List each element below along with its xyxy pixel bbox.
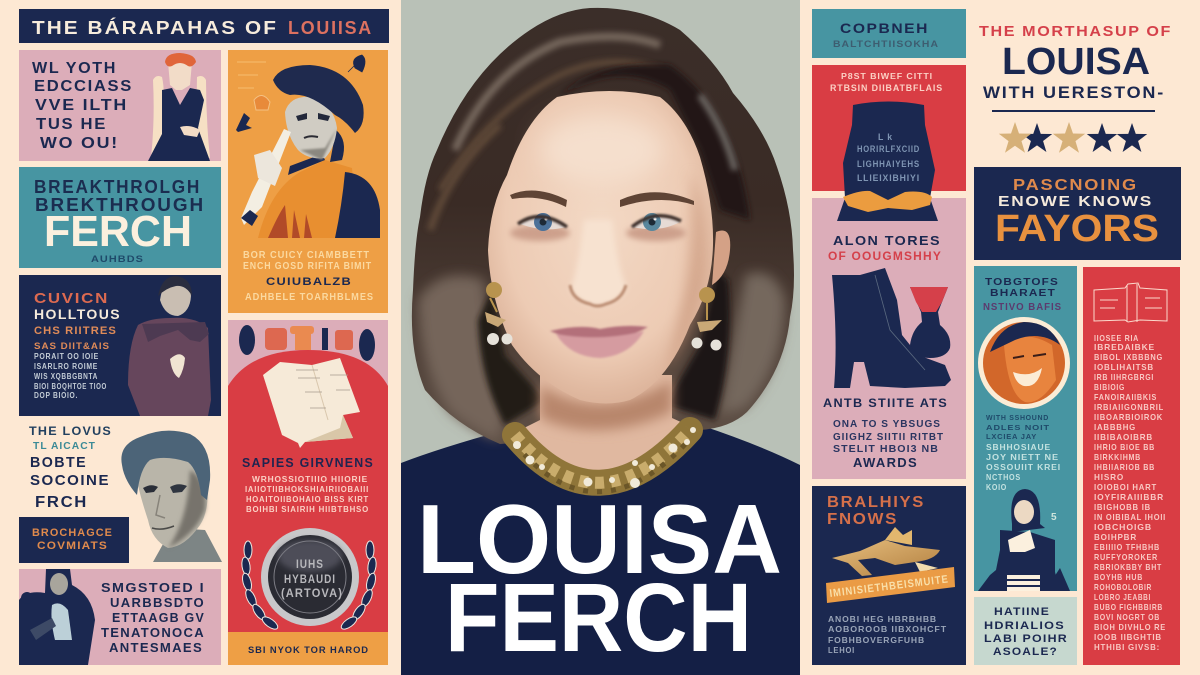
panel: teal column with portraits: 5 xyxy=(1051,512,1058,523)
dress shoulders xyxy=(401,425,800,675)
panel: red long text column: IOYFIRAIIIBBR xyxy=(1094,492,1164,502)
panel: navy brand card with gold emblem: AOBOROOB IIBXOHCFT xyxy=(828,625,947,634)
icon: gold fish emblem xyxy=(832,527,940,576)
panel: red long text column: BOYHB HUB xyxy=(1094,572,1143,582)
panel: pink boots: ONA TO S YBSUGS xyxy=(833,419,941,430)
panel: right column xyxy=(812,9,1181,665)
panel: teal copbneh xyxy=(812,9,966,58)
panel: pink quote with woman in black dress: TUS HE xyxy=(36,116,107,133)
panel: red arch with awards xyxy=(228,350,388,632)
panel: pink boots: GIIGHZ SIITII RITBT xyxy=(833,432,944,443)
panel: red long text column: EBIIIIO TFHBHB xyxy=(1094,542,1160,552)
panel: red long text column: BOIHPBR xyxy=(1094,532,1137,542)
panel: red long text column: HISRO xyxy=(1094,472,1124,482)
panel: navy profile with figure: CHS RIITRES xyxy=(34,325,117,337)
icon: silver award medal with laurels: IUHS xyxy=(296,557,324,571)
panel: orange portrait of woman with microphone: BOR CUICY CIAMBBETT xyxy=(243,250,370,261)
portrait: smiling man in circle xyxy=(978,317,1070,409)
panel: pink boots: AWARDS xyxy=(853,455,918,470)
panel: navy profile with figure: ISARLRO ROIME xyxy=(34,362,98,371)
panel: teal column with portraits xyxy=(974,266,1077,591)
icon: ankle boot xyxy=(832,268,951,388)
panel: red long text column: BIBOL IXBBBNG xyxy=(1094,352,1163,362)
panel: orange portrait of woman with microphone: ENCH GOSD RIFITA BIMIT xyxy=(243,261,372,272)
panel: red long text column: IABBBHG xyxy=(1094,422,1136,432)
portrait: man with swept hair xyxy=(121,431,222,562)
panel: teal breakthrough: AUHBDS xyxy=(91,254,144,264)
panel: teal breakthrough: BREAKTHROLGH xyxy=(34,177,201,197)
panel: pink note with man in coat: ETTAAGB GV xyxy=(112,610,205,625)
panel: teal column with portraits: NCTHOS xyxy=(986,473,1021,482)
panel: teal breakthrough: BREKTHROUGH xyxy=(35,195,205,215)
panel: navy brand card with gold emblem: FOBHBOVERGFUHB xyxy=(828,636,925,645)
panel: navy profile with figure: HOLLTOUS xyxy=(34,306,121,322)
panel: pink quote with woman in black dress: EDCCIASS xyxy=(34,78,133,95)
panel: red long text column: IHRIO BIOE BB xyxy=(1094,442,1155,452)
figure: woman with striped top xyxy=(978,489,1070,591)
panel: mint note: LABI POIHR xyxy=(984,633,1068,645)
panel: mint note: HATIINE xyxy=(994,606,1050,618)
panel: teal breakthrough xyxy=(19,167,221,268)
header banner: THE BÁRAPAHAS OF xyxy=(32,17,278,38)
panel: red with corset shape: P8ST BIWEF CITTI xyxy=(841,72,933,81)
panel: navy favors: FAYORS xyxy=(995,208,1159,250)
panel: red long text column: IIBOARBIOIROK xyxy=(1094,412,1163,422)
icon: open papers xyxy=(263,358,360,448)
panel: red long text column xyxy=(1083,267,1180,665)
nose xyxy=(570,220,627,306)
panel: red long text column: BOVI NOGRT OB xyxy=(1094,612,1160,622)
panel: red with corset shape: RTBSIN DIIBATBFLAIS xyxy=(830,83,943,93)
icon: navy corset with inscription: LIGHHAIYEHS xyxy=(857,159,920,169)
panel: red long text column: RUFFYOROKER xyxy=(1094,552,1158,562)
icon: navy corset with inscription: LLIEIXIBHIYI xyxy=(857,173,920,183)
icon: open book line drawing xyxy=(1094,283,1167,322)
panel: navy favors xyxy=(974,167,1181,260)
panel: orange portrait of woman with microphone: CUIUBALZB xyxy=(266,276,352,288)
panel: mint note: HDRIALIOS xyxy=(984,620,1065,632)
title block: the morthasup of louisa: WITH UERESTON- xyxy=(983,83,1165,102)
panel: red long text column: IRBIAIIGONBRIL xyxy=(1094,402,1164,412)
panel: red long text column: IIOSEE RIA xyxy=(1094,333,1139,343)
panel: navy profile with figure: WIS XQBBGBNTA xyxy=(34,372,98,381)
panel: pink boots: STELIT HBOI3 NB xyxy=(833,444,939,455)
panel: teal copbneh: COPBNEH xyxy=(840,20,929,36)
panel: orange portrait of woman with microphone xyxy=(228,50,388,313)
lips xyxy=(550,326,648,358)
panel: red arch with awards: BOIHBI SIAIRIH HIIBTBHSO xyxy=(246,505,369,514)
panel: red long text column: RBRIOKBBY BHT xyxy=(1094,562,1162,572)
eyes and brows xyxy=(510,191,694,241)
rating stars xyxy=(999,122,1147,153)
panel: pink note with man in coat: SMGSTOED I xyxy=(101,580,205,595)
panel: navy profile with figure: SAS DIIT&AIS xyxy=(34,341,110,351)
banner: IMINISIETHBEISMUITE xyxy=(829,573,949,600)
panel: pink note with man in coat: ANTESMAES xyxy=(109,640,203,655)
portrait background xyxy=(401,0,800,675)
panel: teal column with portraits: KOIO xyxy=(986,483,1007,492)
panel: red long text column: IRB IIHRGBRGI xyxy=(1094,372,1154,382)
panel: orange footer strip: SBI NYOK TOR HAROD xyxy=(248,645,369,655)
panel: left column xyxy=(19,9,389,665)
panel: pink boots xyxy=(812,198,966,479)
panel: red long text column: IOIOBOI HART xyxy=(1094,482,1157,492)
panel: pink strip with silhouettes xyxy=(228,320,388,386)
panel: orange footer strip xyxy=(228,632,388,665)
icon: silver award medal with laurels: (ARTOVA) xyxy=(281,586,343,600)
panel: teal column with portraits: SBHHOSIAUE xyxy=(986,443,1051,452)
panel: pink boots: OF OOUGMSHHY xyxy=(828,249,942,263)
callout: brochagce covmiats: COVMIATS xyxy=(37,540,108,552)
panel: red with corset shape xyxy=(812,65,966,191)
panel: red long text column: IOOB IIBGHTIB xyxy=(1094,632,1162,642)
callout: brochagce covmiats: BROCHAGCE xyxy=(32,527,113,539)
text block: the lovus: THE LOVUS xyxy=(29,424,112,438)
panel: red arch with awards: WRHOSSIOTIIIO HIIORIE xyxy=(252,475,368,484)
panel: navy profile with figure: PORAIT OO IOIE xyxy=(34,352,99,361)
header banner: LOUIISA xyxy=(288,18,373,38)
panel: red arch with awards: IAIIOTIIBHOKSHIAIRIIOBAIII xyxy=(245,485,369,494)
panel: red arch with awards: SAPIES GIRVNENS xyxy=(242,455,374,470)
panel: pink quote with woman in black dress: VVE ILTH xyxy=(35,97,128,114)
panel: teal column with portraits: LXCIEA JAY xyxy=(986,434,1037,441)
panel: teal breakthrough: FERCH xyxy=(44,207,192,256)
panel: red long text column: ROHOBOLOBIR xyxy=(1094,582,1152,592)
panel: red long text column: BIRKKIHMB xyxy=(1094,452,1141,462)
icon: navy corset with inscription: HORIRLFXCIID xyxy=(857,144,920,154)
icon: silver award medal with laurels xyxy=(241,528,377,631)
panel: pink quote with woman in black dress xyxy=(19,50,221,161)
earrings xyxy=(485,282,722,350)
panel: red long text column: IBIGHOBB IB xyxy=(1094,502,1151,512)
panel: pink note with man in coat: TENATONOCA xyxy=(101,625,205,640)
title block: the morthasup of louisa: THE MORTHASUP OF xyxy=(979,23,1172,40)
panel: mint note xyxy=(974,597,1077,665)
title block: the morthasup of louisa xyxy=(979,23,1172,112)
icon: vase xyxy=(910,287,950,358)
panel: central portrait xyxy=(401,0,800,675)
panel: red long text column: HTHIBI GIVSB: xyxy=(1094,642,1160,652)
panel: navy brand card with gold emblem xyxy=(812,486,966,665)
callout: brochagce covmiats xyxy=(19,517,129,563)
text block: the lovus: FRCH xyxy=(35,494,88,511)
panel: pink note with man in coat: UARBBSDTO xyxy=(110,595,205,610)
panel: teal column with portraits: TOBGTOFS xyxy=(985,277,1059,288)
panel: navy profile with figure xyxy=(19,275,221,416)
panel: pink quote with woman in black dress: WL YOTH xyxy=(32,60,117,77)
panel: pink quote with woman in black dress: WO OU! xyxy=(40,135,119,152)
text block: the lovus: TL AICACT xyxy=(33,441,96,452)
icon: navy corset with inscription: L k xyxy=(878,132,893,142)
title: name: LOUISA xyxy=(417,484,782,594)
panel: navy profile with figure: DOP BIOIO. xyxy=(34,391,78,400)
title: name: FERCH xyxy=(445,563,752,672)
panel: red long text column: BIBIOIG xyxy=(1094,382,1125,392)
panel: navy brand card with gold emblem: BRALHIYS xyxy=(827,494,925,511)
neck xyxy=(512,375,694,482)
header banner xyxy=(19,9,389,43)
text block: the lovus xyxy=(29,424,112,511)
panel: red long text column: IHBIIARIOB BB xyxy=(1094,462,1155,472)
panel: red long text column: FANOIRAIIBKIS xyxy=(1094,392,1157,402)
text block: the lovus: BOBTE xyxy=(30,454,87,471)
panel: red long text column: BUBO FIGHBBIRB xyxy=(1094,602,1163,612)
panel: red long text column: IOBLIHAITSB xyxy=(1094,362,1154,372)
panel: orange portrait of woman with microphone: ADHBELE TOARHBLMES xyxy=(245,292,374,303)
hair xyxy=(412,8,794,444)
face xyxy=(488,91,713,404)
text block: the lovus: SOCOINE xyxy=(30,472,110,489)
panel: red long text column: IIBIBAOIBRB xyxy=(1094,432,1153,442)
title block: the morthasup of louisa: LOUISA xyxy=(1002,41,1150,83)
necklace xyxy=(513,427,696,492)
panel: navy profile with figure: BIOI BOQHTOE TIOO xyxy=(34,382,107,391)
panel: teal copbneh: BALTCHTIISOKHA xyxy=(833,39,939,49)
icon: silver award medal with laurels: HYBAUDI xyxy=(284,572,336,586)
panel: navy profile with figure: CUVICN xyxy=(34,290,109,307)
title: name xyxy=(417,484,782,672)
panel: teal column with portraits: BHARAET xyxy=(990,288,1056,299)
panel: navy brand card with gold emblem: ANOBI HEG HBRBHBB xyxy=(828,615,937,624)
panel: teal column with portraits: OSSOUIIT KREI xyxy=(986,463,1061,472)
panel: mint note: ASOALE? xyxy=(993,646,1058,658)
panel: navy brand card with gold emblem: FNOWS xyxy=(827,511,898,528)
portrait: woman with bob hair xyxy=(401,8,800,675)
panel: teal column with portraits: WITH SSHOUND xyxy=(986,415,1049,422)
panel: pink boots: ALON TORES xyxy=(833,233,941,248)
icon: navy corset with inscription xyxy=(837,102,938,221)
panel: pink note with man in coat xyxy=(19,569,221,665)
panel: teal column with portraits: ADLES NOIT xyxy=(986,425,1050,432)
panel: red long text column: BIOH DIVHLO RE xyxy=(1094,622,1166,632)
panel: red long text column: IOBCHOIGB xyxy=(1094,522,1152,532)
panel: teal column with portraits: JOY NIETT NE xyxy=(986,453,1059,462)
panel: red long text column: IN OIBIBAL IHOII xyxy=(1094,512,1166,522)
panel: pink boots: ANTB STIITE ATS xyxy=(823,396,948,410)
panel: teal column with portraits: NSTIVO BAFIS xyxy=(983,302,1062,313)
panel: red long text column: LOBRO JEABBI xyxy=(1094,592,1151,602)
panel: navy favors: PASCNOING xyxy=(1013,177,1138,194)
panel: navy favors: ENOWE KNOWS xyxy=(998,193,1153,210)
panel: red long text column: IBREDAIBKE xyxy=(1094,342,1155,352)
panel: navy brand card with gold emblem: LEHOI xyxy=(828,646,855,655)
panel: red arch with awards: HOAITOIIBOHAIO BISS KIRT xyxy=(246,495,369,504)
